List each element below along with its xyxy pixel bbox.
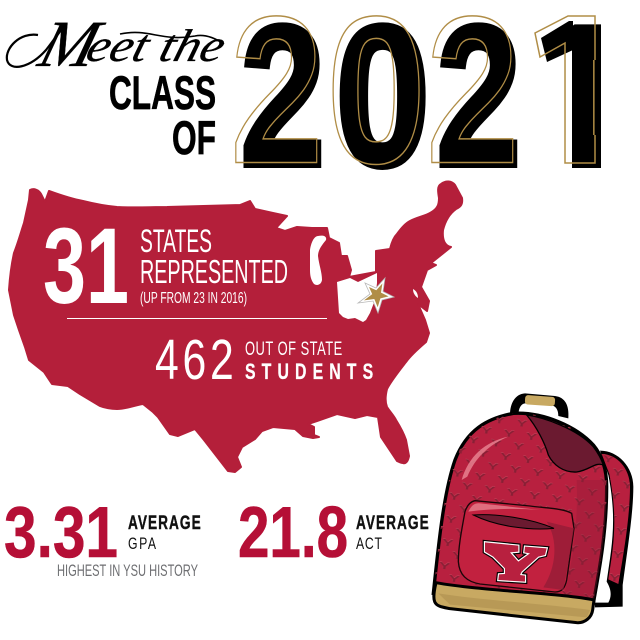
label: OUT OF STATE: OUT OF STATE xyxy=(245,339,342,360)
pocket flap highlight xyxy=(468,503,540,512)
label: STATES: STATES xyxy=(140,223,212,259)
top flap xyxy=(527,415,603,472)
Ohio state highlight xyxy=(337,273,377,322)
backpack body xyxy=(433,413,607,603)
stat: 21.8 average ACT: ACT xyxy=(356,535,382,554)
right strap xyxy=(595,451,633,607)
note: highest in YSU history: HIGHEST IN YSU HISTORY xyxy=(57,561,198,580)
stat: 3.31 average GPA: GPA xyxy=(128,535,156,554)
label: STUDENTS: STUDENTS xyxy=(245,361,373,385)
title: 2021 black numerals xyxy=(244,21,601,170)
divider line xyxy=(67,318,327,319)
stat: 21.8 average ACT: AVERAGE xyxy=(356,512,429,534)
front pocket xyxy=(458,501,574,592)
stat: 31: 31 xyxy=(43,205,129,326)
title: Meet the: eet the xyxy=(81,21,232,72)
title: 2021 gold outline numerals xyxy=(235,15,596,166)
stat: 462: 462 xyxy=(155,327,234,391)
title: Meet the: M xyxy=(31,7,112,81)
title: Meet the xyxy=(7,7,232,81)
map of the United States xyxy=(9,181,462,472)
Lake Michigan xyxy=(310,236,326,285)
label: up from 23 in 2016: (UP FROM 23 IN 2016) xyxy=(140,290,247,307)
tan base xyxy=(434,583,594,623)
pocket opening xyxy=(473,515,554,529)
stat: 21.8 average ACT: 21.8 xyxy=(238,493,348,573)
body shading xyxy=(563,480,607,603)
title: OF: OF xyxy=(172,111,216,164)
highlight xyxy=(462,437,508,480)
icon: YSU backpack xyxy=(433,393,633,623)
Chesapeake bay xyxy=(413,289,418,298)
pocket Y logo xyxy=(485,542,547,582)
icon: gold star over Youngstown xyxy=(358,278,394,313)
handle xyxy=(510,393,568,418)
label: REPRESENTED: REPRESENTED xyxy=(140,253,288,290)
stat: 3.31 average GPA: AVERAGE xyxy=(128,512,201,534)
stat: 3.31 average GPA: 3.31 xyxy=(4,493,118,573)
title: CLASS: CLASS xyxy=(109,66,216,119)
